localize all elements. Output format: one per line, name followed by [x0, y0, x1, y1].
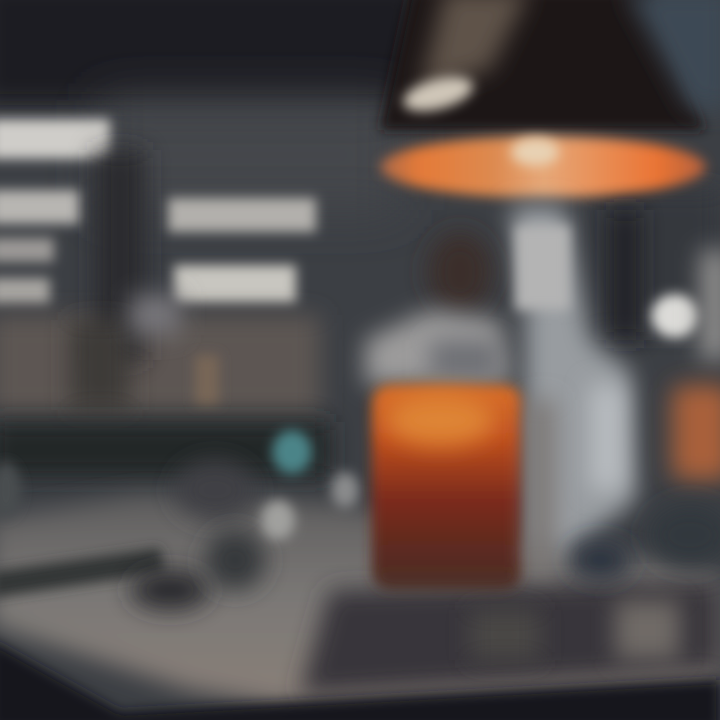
scientist: figure in white coat	[365, 210, 640, 385]
lamp: dark shade	[380, 0, 720, 130]
flask: clear glass	[510, 205, 635, 580]
lamp: glowing orange rim	[380, 136, 706, 198]
table: metal work surface	[0, 495, 720, 720]
tools: dark equipment on table	[0, 430, 359, 610]
bottle: right edge with orange liquid	[648, 250, 720, 567]
window lights: left bright panels	[0, 119, 316, 304]
jar: orange liquid beaker	[372, 385, 554, 590]
shelves: blurred bottles and cabinets	[0, 150, 330, 477]
